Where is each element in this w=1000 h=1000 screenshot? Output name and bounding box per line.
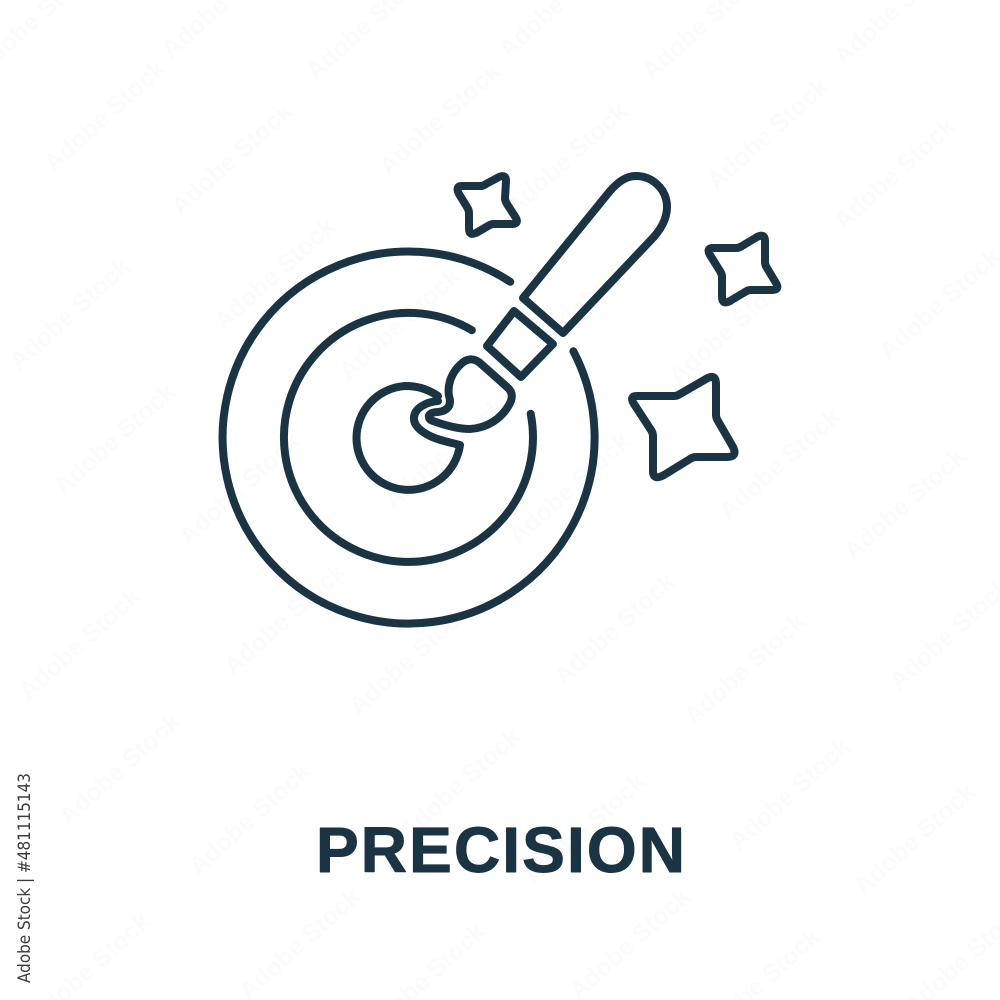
watermark pattern: Adobe Stock <box>39 54 171 178</box>
watermark pattern: Adobe Stock <box>549 567 681 691</box>
watermark pattern: Adobe Stock <box>344 597 476 721</box>
icon: brush tip <box>429 359 512 429</box>
watermark pattern: Adobe Stock <box>702 72 834 196</box>
icon: medium sparkle star <box>709 236 777 302</box>
watermark pattern: Adobe Stock <box>664 267 796 391</box>
watermark pattern: Adobe Stock <box>839 442 971 566</box>
watermark pattern: Adobe Stock <box>14 582 146 706</box>
target: middle ring <box>284 313 533 562</box>
watermark pattern: Adobe Stock <box>374 57 506 181</box>
watermark pattern: Adobe Stock <box>504 427 636 551</box>
icon: precision target with paintbrush <box>223 176 777 624</box>
watermark pattern: Adobe Stock <box>539 222 671 346</box>
watermark pattern: Adobe Stock <box>394 722 526 846</box>
watermark pattern: Adobe Stock <box>49 377 181 501</box>
watermark pattern: Adobe Stock <box>334 262 466 386</box>
watermark pattern: Adobe Stock <box>379 392 511 516</box>
watermark pattern: Adobe Stock <box>501 97 633 221</box>
watermark pattern: Adobe Stock <box>166 97 298 221</box>
watermark pattern: Adobe Stock <box>714 402 846 526</box>
title: PRECISION <box>316 814 685 886</box>
watermark pattern: Adobe Stock <box>219 557 351 681</box>
icon: small sparkle star <box>458 176 517 234</box>
watermark pattern: Adobe Stock <box>849 777 981 901</box>
icon: brush handle <box>523 176 667 333</box>
watermark pattern: Adobe Stock <box>519 767 651 891</box>
watermark pattern: Adobe Stock <box>209 212 341 336</box>
watermark pattern: Adobe Stock <box>829 112 961 236</box>
watermark pattern: Adobe Stock <box>174 427 306 551</box>
watermark pattern: Adobe Stock <box>4 252 136 376</box>
target: inner bullseye <box>356 386 460 490</box>
icon: large sparkle star <box>632 377 735 477</box>
watermark pattern: Adobe Stock <box>724 732 856 856</box>
icon: brush ferrule <box>487 311 553 377</box>
target: outer ring <box>223 252 595 624</box>
watermark pattern: Adobe Stock <box>184 757 316 881</box>
stock id side text: Adobe Stock | #481115143 <box>15 773 34 983</box>
watermark pattern: Adobe Stock <box>54 707 186 831</box>
watermark pattern: Adobe Stock <box>679 607 811 731</box>
